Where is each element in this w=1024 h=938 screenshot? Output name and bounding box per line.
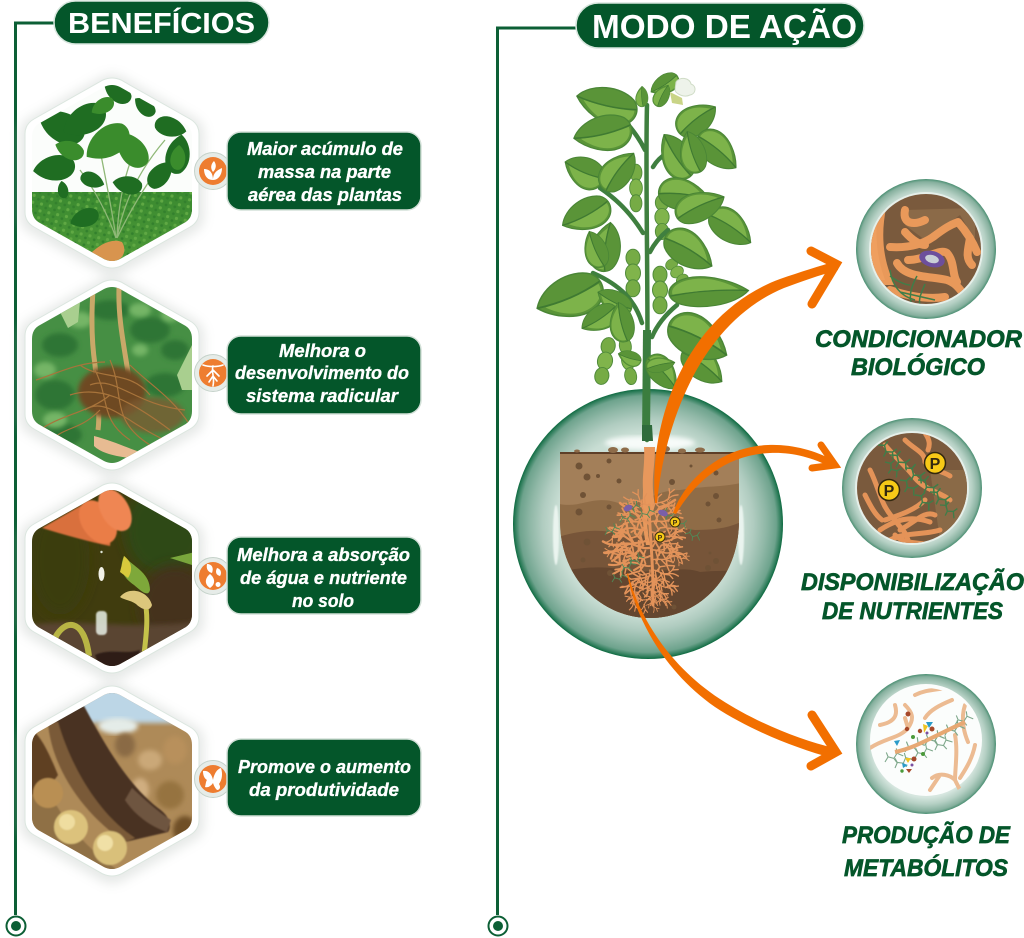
heading: BENEFÍCIOS xyxy=(54,1,269,44)
heading: MODO DE AÇÃO: MODO DE AÇÃO xyxy=(592,8,857,45)
benefit 1: text box xyxy=(227,132,421,210)
bacteria and phosphorus markers xyxy=(623,503,680,542)
benefit 1: text box: massa na parte xyxy=(258,161,391,182)
benefit 4: icon xyxy=(194,760,232,798)
soil layers xyxy=(555,450,745,620)
stem collar xyxy=(642,425,653,441)
arrow to condicionador biológico xyxy=(654,251,838,503)
benefit 4: text box: Promove o aumento xyxy=(238,756,411,777)
arrow to disponibilização de nutrientes xyxy=(673,445,835,514)
benefit 1: photo hexagon, soybean plant in field xyxy=(20,74,204,276)
benefit 4: text box xyxy=(227,739,421,816)
left timeline line xyxy=(6,23,56,936)
label: produção de metabólitos: METABÓLITOS xyxy=(844,854,1009,882)
bacteria and phosphorus markers: P xyxy=(673,520,678,527)
benefit 3: text box: no solo xyxy=(292,590,354,611)
sphere: disponibilização de nutrientes xyxy=(842,418,982,558)
sphere: disponibilização de nutrientes: P xyxy=(884,483,895,500)
benefit 3: icon xyxy=(194,558,232,594)
benefit 2: text box: Melhora o xyxy=(279,340,366,361)
benefit 1: text box: Maior acúmulo de xyxy=(247,138,403,159)
surface stones xyxy=(574,446,705,454)
arrow to produção de metabólitos xyxy=(627,573,836,766)
benefit 1: text box: aérea das plantas xyxy=(248,184,402,205)
label: condicionador biológico xyxy=(815,326,1022,381)
microbial filaments xyxy=(602,500,702,586)
label: produção de metabólitos: PRODUÇÃO DE xyxy=(842,821,1011,849)
taproot xyxy=(643,447,655,545)
benefit 4: text box: da produtividade xyxy=(249,779,399,800)
label: condicionador biológico: BIOLÓGICO xyxy=(851,353,985,381)
heading: BENEFÍCIOS: BENEFÍCIOS xyxy=(68,6,255,40)
pods xyxy=(593,164,691,386)
benefit 1: icon xyxy=(194,152,232,190)
benefit 2: photo hexagon, roots xyxy=(20,276,204,478)
label: disponibilização de nutrientes xyxy=(801,568,1024,625)
benefit 3: text box xyxy=(227,537,421,614)
benefit 3: text box: Melhora a absorção xyxy=(237,544,410,565)
label: condicionador biológico: CONDICIONADOR xyxy=(815,326,1022,353)
sphere: condicionador biológico xyxy=(856,179,996,319)
benefit 2: text box: desenvolvimento do xyxy=(235,362,409,383)
bacteria and phosphorus markers: P xyxy=(658,535,663,542)
label: produção de metabólitos xyxy=(842,821,1011,882)
sphere: disponibilização de nutrientes: P xyxy=(930,456,941,473)
label: disponibilização de nutrientes: DE NUTRIENTES xyxy=(822,598,1004,625)
benefit 3: photo hexagon, seedling and droplet xyxy=(20,479,210,681)
root system xyxy=(599,486,691,616)
sphere: produção de metabólitos xyxy=(856,674,996,814)
right timeline line xyxy=(488,28,578,936)
benefit 2: icon xyxy=(194,354,232,392)
benefit 4: photo hexagon, soybean pod xyxy=(20,682,204,884)
flower xyxy=(670,78,695,105)
soybean plant xyxy=(530,69,760,441)
benefit 3: text box: de água e nutriente xyxy=(240,567,407,588)
central sphere with soil and roots xyxy=(513,389,783,659)
leaves xyxy=(530,69,760,396)
benefit 2: text box: sistema radicular xyxy=(246,385,400,406)
benefit 2: text box xyxy=(227,336,421,414)
